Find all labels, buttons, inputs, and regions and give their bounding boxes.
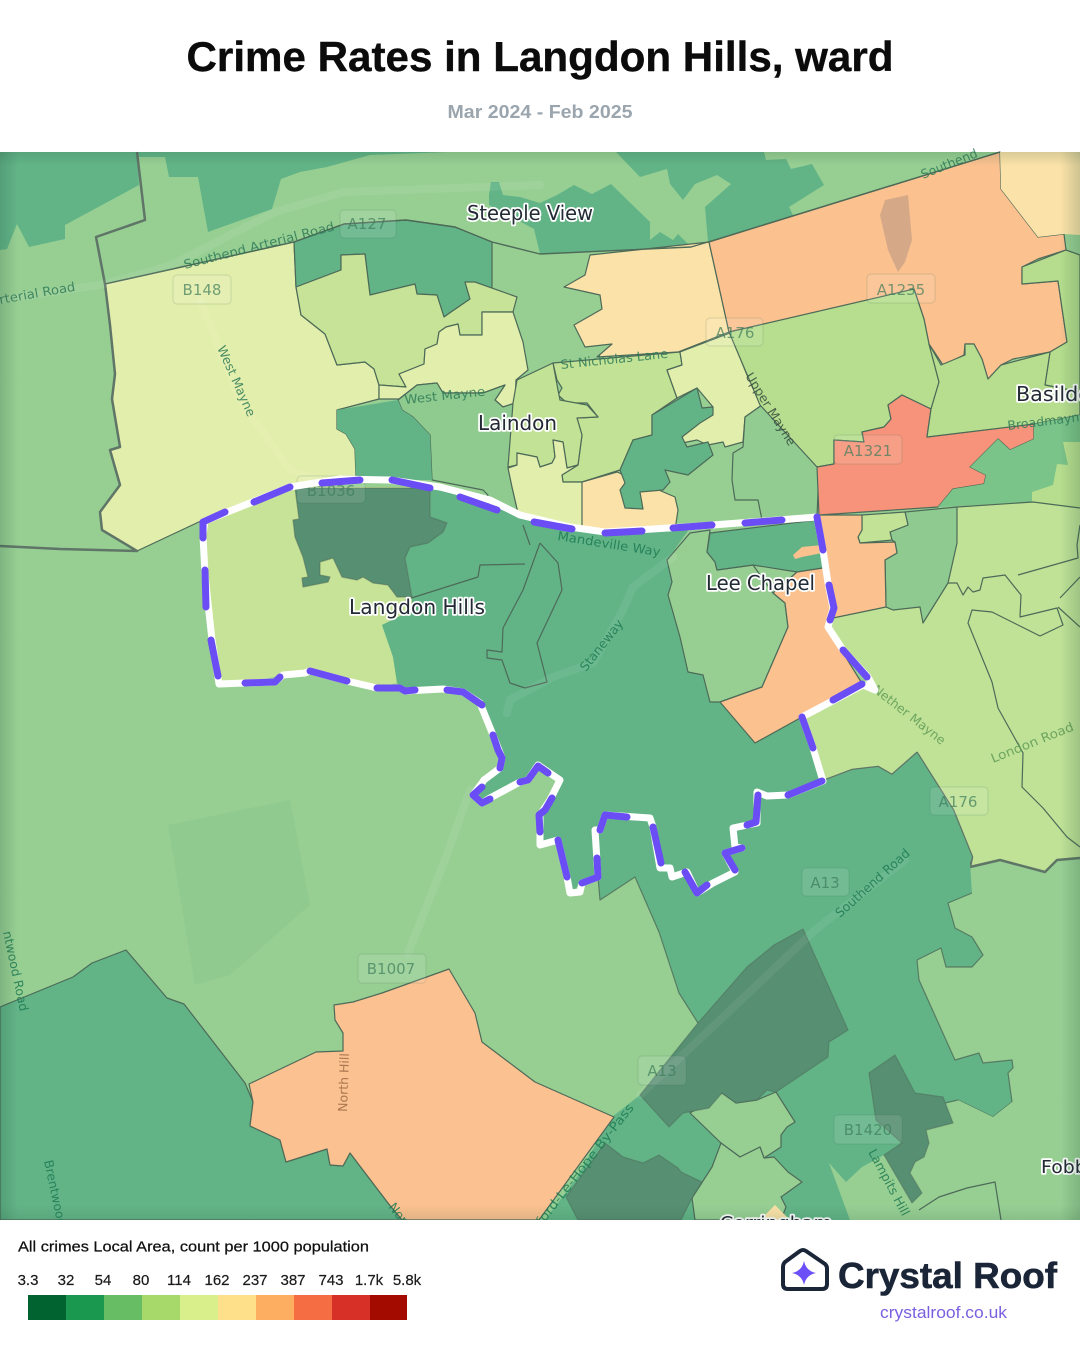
road shields: A13	[647, 1062, 677, 1080]
legend values: 54	[95, 1272, 111, 1289]
place labels: Laindon	[478, 411, 557, 435]
road labels: North Hill	[386, 1200, 434, 1255]
road labels: Lampits Hill	[865, 1146, 913, 1218]
road labels: ford-Le-Hope By-Pass	[533, 1100, 637, 1228]
road labels: Upper Mayne	[742, 370, 799, 448]
legend colour scale	[28, 1295, 407, 1320]
legend values: 80	[133, 1272, 149, 1289]
icon: house with star	[783, 1250, 827, 1289]
website: crystalroof.co.uk	[880, 1304, 1008, 1322]
road labels: Brentwood Road	[41, 1159, 77, 1262]
road shields: A1321	[844, 442, 892, 460]
wordmark: Crystal Roof	[838, 1255, 1058, 1296]
road labels: Southend Arterial Road	[182, 219, 336, 272]
legend values: 1.7k	[355, 1272, 384, 1289]
road labels: West Mayne	[214, 343, 259, 419]
road labels: Southend Road	[832, 845, 913, 920]
road shields	[173, 210, 988, 1144]
road shields: B1420	[844, 1121, 892, 1139]
road labels: West Mayne	[404, 384, 486, 407]
legend values: 237	[242, 1272, 268, 1289]
legend values: 32	[58, 1272, 74, 1289]
footer background	[0, 1220, 1080, 1350]
road shields: A1235	[877, 281, 925, 299]
place labels: Langdon Hills	[349, 595, 485, 619]
road labels: ntwood Road	[0, 930, 32, 1012]
place labels: Steeple View	[467, 201, 593, 225]
road shields: A127	[348, 215, 386, 233]
road labels: North Hill	[335, 1053, 352, 1112]
road shields: B148	[183, 281, 221, 299]
road labels: Nether Mayne	[870, 682, 949, 748]
legend values: 743	[318, 1272, 344, 1289]
place labels: Lee Chapel	[706, 571, 815, 595]
legend values: 387	[280, 1272, 306, 1289]
ward boundary	[203, 479, 875, 893]
road labels: Southend	[919, 145, 980, 182]
place labels: Corringham	[720, 1213, 832, 1234]
legend values: 114	[167, 1272, 191, 1289]
road shields: A13	[810, 874, 840, 892]
road shields: A176	[939, 793, 977, 811]
subtitle: date range: Mar 2024 - Feb 2025	[448, 102, 632, 122]
legend	[18, 1238, 422, 1320]
title: Crime Rates in Langdon Hills, ward	[186, 33, 894, 80]
road labels: London Road	[989, 719, 1076, 766]
legend values	[18, 1272, 422, 1289]
road labels: St Nicholas Lane	[560, 346, 669, 372]
logo: Crystal Roof	[783, 1250, 1058, 1322]
road shields: B1036	[307, 482, 355, 500]
road labels: Staneway	[577, 616, 627, 674]
road shields: A176	[716, 324, 754, 342]
road shields: B1007	[367, 960, 415, 978]
legend values: 5.8k	[393, 1272, 422, 1289]
legend title: All crimes Local Area, count per 1000 population	[18, 1238, 369, 1256]
place labels	[349, 201, 1080, 1234]
road labels: Mandeville Way	[557, 528, 662, 559]
road labels: rterial Road	[0, 279, 76, 307]
legend values: 3.3	[18, 1272, 38, 1289]
legend values: 162	[204, 1272, 230, 1289]
